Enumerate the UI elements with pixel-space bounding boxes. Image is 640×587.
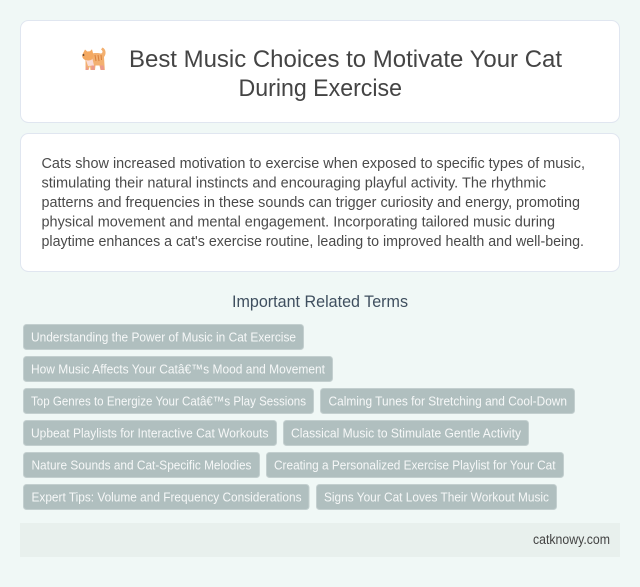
tag: Classical Music to Stimulate Gentle Activity (291, 426, 522, 440)
panel: intro paragraph: stimulating their natural instincts and encouraging playful activity. The rhythmic (42, 174, 546, 192)
tag (24, 356, 332, 382)
panel: intro paragraph: physical movement and mental engagement. Incorporating tailored music during (42, 214, 555, 230)
footer (20, 523, 620, 557)
tag (266, 452, 564, 478)
tag group: related terms (24, 324, 574, 510)
title text (129, 46, 562, 102)
tag (24, 324, 304, 350)
heading: related terms: Important Related Terms (232, 293, 408, 311)
tag: How Music Affects Your Catâ€™s Mood and Movement (31, 362, 325, 376)
title text: Best Music Choices to Motivate Your Cat (129, 46, 562, 73)
tag: Upbeat Playlists for Interactive Cat Workouts (31, 426, 268, 440)
tag (24, 420, 276, 446)
tag: Top Genres to Energize Your Catâ€™s Play Sessions (31, 394, 306, 408)
icon: cat (82, 48, 106, 70)
tag: Understanding the Power of Music in Cat Exercise (31, 330, 296, 344)
tag: Creating a Personalized Exercise Playlist for Your Cat (274, 458, 556, 472)
tag (24, 452, 260, 478)
title card (20, 20, 620, 122)
tag (316, 484, 556, 510)
tag (320, 388, 574, 414)
tag (284, 420, 528, 446)
tag: Expert Tips: Volume and Frequency Considerations (32, 490, 302, 504)
tag (24, 484, 309, 510)
panel: intro paragraph: playtime enhances a cat's exercise routine, leading to improved health and well-being. (42, 233, 584, 250)
tag: Signs Your Cat Loves Their Workout Music (324, 490, 550, 504)
tag (24, 388, 314, 414)
footer: catknowy.com (533, 532, 610, 547)
tag: Calming Tunes for Stretching and Cool-Down (328, 394, 567, 408)
panel: intro paragraph (20, 134, 620, 272)
panel: intro paragraph: patterns and frequencies in these sounds can trigger curiosity and energy, promoting (42, 194, 580, 211)
title text: During Exercise (238, 75, 402, 102)
tag: Nature Sounds and Cat-Specific Melodies (32, 458, 252, 472)
panel: intro paragraph: Cats show increased motivation to exercise when exposed to specific types of music, (42, 155, 585, 172)
